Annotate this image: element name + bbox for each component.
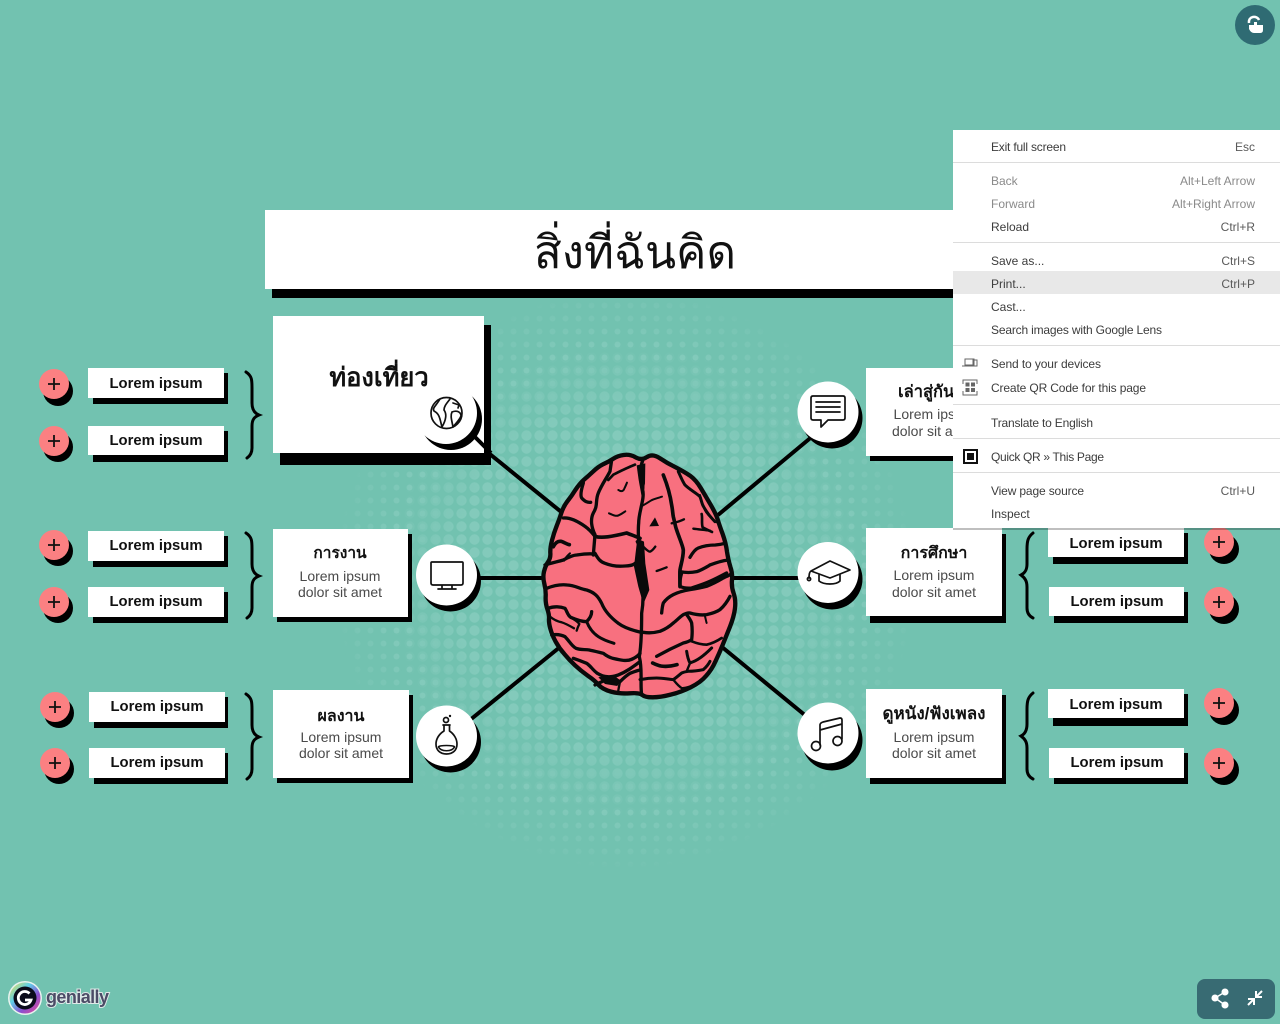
icon: speech bubble — [798, 382, 862, 448]
icon: send to devices — [962, 359, 977, 366]
browser context menu: Alt+Left Arrow — [1180, 174, 1255, 188]
browser context menu: Esc — [1235, 140, 1255, 154]
card: movies and music: ดูหนัง/ฟังเพลง — [883, 704, 985, 725]
share and fullscreen control bar — [1197, 979, 1275, 1019]
card: education: การศึกษา — [901, 544, 967, 562]
card: education: Lorem ipsum — [894, 567, 974, 583]
card: work: Lorem ipsum — [300, 568, 380, 584]
left group: work items: Lorem ipsum — [110, 593, 202, 610]
halftone dot field — [368, 318, 880, 841]
card: work: dolor sit amet — [298, 584, 382, 600]
right group: movies and music items: Lorem ipsum — [1070, 754, 1164, 771]
left group: work items: Lorem ipsum — [110, 537, 202, 554]
genially logo: genially — [46, 987, 109, 1007]
card: results: Lorem ipsum — [301, 729, 381, 745]
right group: movies and music items: Lorem ipsum — [1070, 696, 1162, 713]
card: movies and music — [866, 689, 1006, 784]
card: education: dolor sit amet — [892, 584, 976, 600]
left group: results items: Lorem ipsum — [110, 754, 204, 771]
card: stories: Lorem ipsum — [894, 406, 974, 422]
browser context menu: Back — [991, 174, 1019, 188]
left group: travel items — [39, 368, 259, 462]
right group: education items: Lorem ipsum — [1070, 593, 1164, 610]
connector lines — [470, 435, 814, 720]
icon: share — [1212, 989, 1228, 1008]
browser context menu — [953, 130, 1280, 530]
browser context menu: Alt+Right Arrow — [1172, 197, 1255, 211]
card: work — [273, 529, 412, 622]
browser context menu: Ctrl+S — [1221, 254, 1255, 268]
right group: movies and music items — [1021, 688, 1239, 785]
icon: graduation cap — [798, 542, 862, 610]
card: movies and music: dolor sit amet — [892, 745, 976, 761]
left group: results items — [40, 692, 259, 784]
card: travel — [273, 316, 491, 465]
icon: QR code — [963, 380, 977, 395]
browser context menu: Translate to English — [991, 416, 1093, 430]
browser context menu: Ctrl+U — [1221, 484, 1255, 498]
browser context menu: Create QR Code for this page — [991, 381, 1146, 395]
icon: quick QR — [963, 449, 978, 464]
browser context menu: Ctrl+P — [1221, 277, 1255, 291]
icon: flask — [416, 706, 481, 772]
unlock button — [1235, 5, 1275, 45]
card: stories: เล่าสู่กันฟัง — [898, 383, 974, 403]
icon: music notes — [798, 702, 862, 770]
browser context menu: Quick QR » This Page — [991, 450, 1104, 464]
left group: work items — [39, 530, 259, 623]
browser context menu: Send to your devices — [991, 357, 1101, 371]
browser context menu: Cast... — [991, 300, 1026, 314]
browser context menu: Save as... — [991, 254, 1044, 268]
left group: results items: Lorem ipsum — [110, 698, 204, 715]
title banner — [265, 210, 1012, 298]
brain illustration — [543, 455, 735, 697]
card: movies and music: Lorem ipsum — [894, 729, 974, 745]
card: travel: ท่องเที่ยว — [329, 359, 429, 392]
browser context menu: View page source — [991, 484, 1084, 498]
browser context menu: Exit full screen — [991, 140, 1066, 154]
left group: travel items: Lorem ipsum — [110, 375, 202, 392]
browser context menu: Search images with Google Lens — [991, 323, 1162, 337]
browser context menu: Inspect — [991, 507, 1030, 521]
card: stories: dolor sit amet — [892, 423, 976, 439]
title banner: สิ่งที่ฉันคิด — [534, 221, 736, 278]
card: results: dolor sit amet — [299, 745, 383, 761]
card: work: การงาน — [313, 545, 367, 562]
left group: travel items: Lorem ipsum — [110, 432, 202, 449]
browser context menu: Forward — [991, 197, 1035, 211]
genially logo — [8, 981, 109, 1015]
right group: education items: Lorem ipsum — [1070, 535, 1162, 552]
card: stories — [866, 368, 1006, 461]
browser context menu: Reload — [991, 220, 1029, 234]
card: education — [866, 528, 1006, 623]
icon: monitor — [416, 544, 481, 612]
card: results — [273, 690, 413, 783]
card: results: ผลงาน — [318, 708, 365, 725]
icon: exit fullscreen — [1248, 991, 1262, 1005]
right group: education items — [1021, 527, 1239, 624]
browser context menu: Print... — [991, 277, 1026, 291]
browser context menu: Ctrl+R — [1221, 220, 1255, 234]
icon: globe — [415, 382, 491, 453]
